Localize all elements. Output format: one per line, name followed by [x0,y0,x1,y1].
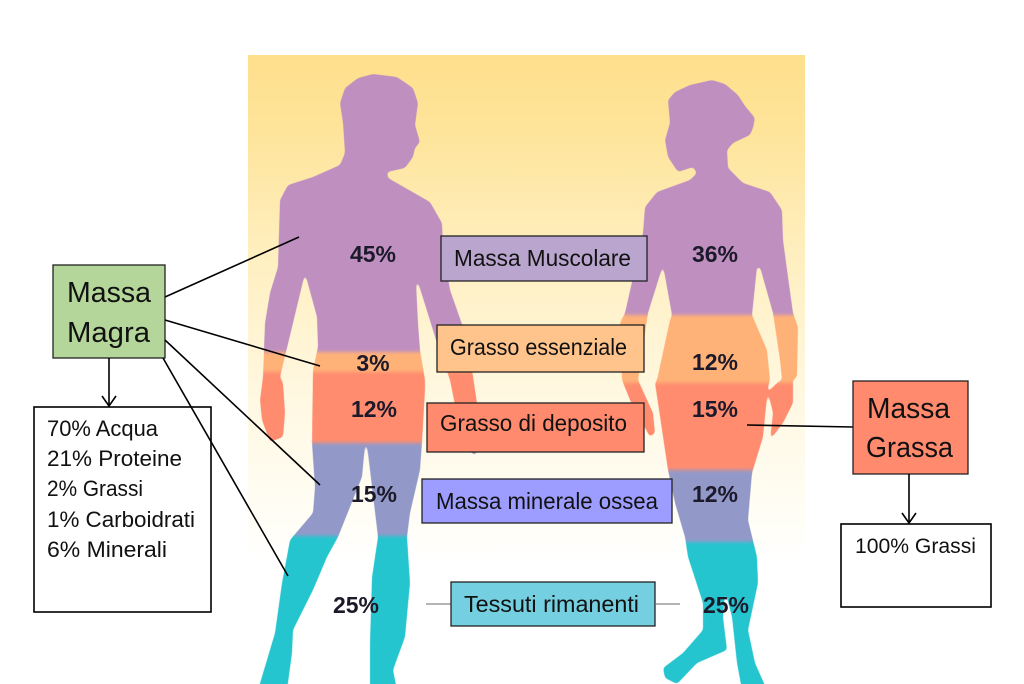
panel: Massa Magra composition [34,407,211,612]
panel: Massa Grassa composition [841,524,991,607]
figure: woman silhouette [610,70,805,684]
label: Massa minerale ossea [422,479,672,523]
percentages: man: 45% [350,241,396,267]
callout: Massa Magra: Massa [67,277,152,309]
panel: Massa Magra composition: 70% Acqua [47,416,159,441]
percentages: man: 12% [351,396,397,422]
arrow: Massa Grassa to composition [902,474,916,523]
connector line to Massa Grassa [747,425,853,427]
label: Tessuti rimanenti [451,582,655,626]
label: Tessuti rimanenti: Tessuti rimanenti [464,591,639,617]
label: Grasso essenziale [437,325,644,372]
label: Grasso di deposito: Grasso di deposito [440,410,627,436]
panel: Massa Magra composition: 2% Grassi [47,476,143,501]
figure: man silhouette [260,74,477,684]
label: Massa Muscolare [441,236,647,281]
percentages: woman: 12% [692,481,738,507]
connector lines: Tessuti rimanenti [426,603,680,605]
panel: Massa Grassa composition: 100% Grassi [855,535,976,558]
callout: Massa Magra: Magra [67,317,151,349]
percentages: man: 15% [351,481,397,507]
arrow: Massa Magra to composition [102,358,116,406]
percentages: man: 25% [333,592,379,618]
callout: Massa Grassa: Grassa [866,432,954,464]
panel: Massa Magra composition: 21% Proteine [47,446,182,471]
label: Massa Muscolare: Massa Muscolare [454,245,631,271]
callout: Massa Grassa [853,381,968,474]
percentages: man [333,241,397,618]
label: Grasso di deposito [427,403,644,452]
percentages: man: 3% [356,350,390,376]
percentages: woman [692,241,749,618]
label: Massa minerale ossea: Massa minerale ossea [436,488,658,514]
background panel [248,55,805,684]
percentages: woman: 15% [692,396,738,422]
percentages: woman: 36% [692,241,738,267]
callout: Massa Grassa: Massa [867,393,951,425]
percentages: woman: 12% [692,349,738,375]
label: Grasso essenziale: Grasso essenziale [450,334,627,360]
callout: Massa Magra [53,265,165,358]
panel: Massa Magra composition: 6% Minerali [47,537,167,562]
percentages: woman: 25% [703,592,749,618]
panel: Massa Magra composition: 1% Carboidrati [47,507,195,532]
connector lines from Massa Magra [163,237,320,576]
